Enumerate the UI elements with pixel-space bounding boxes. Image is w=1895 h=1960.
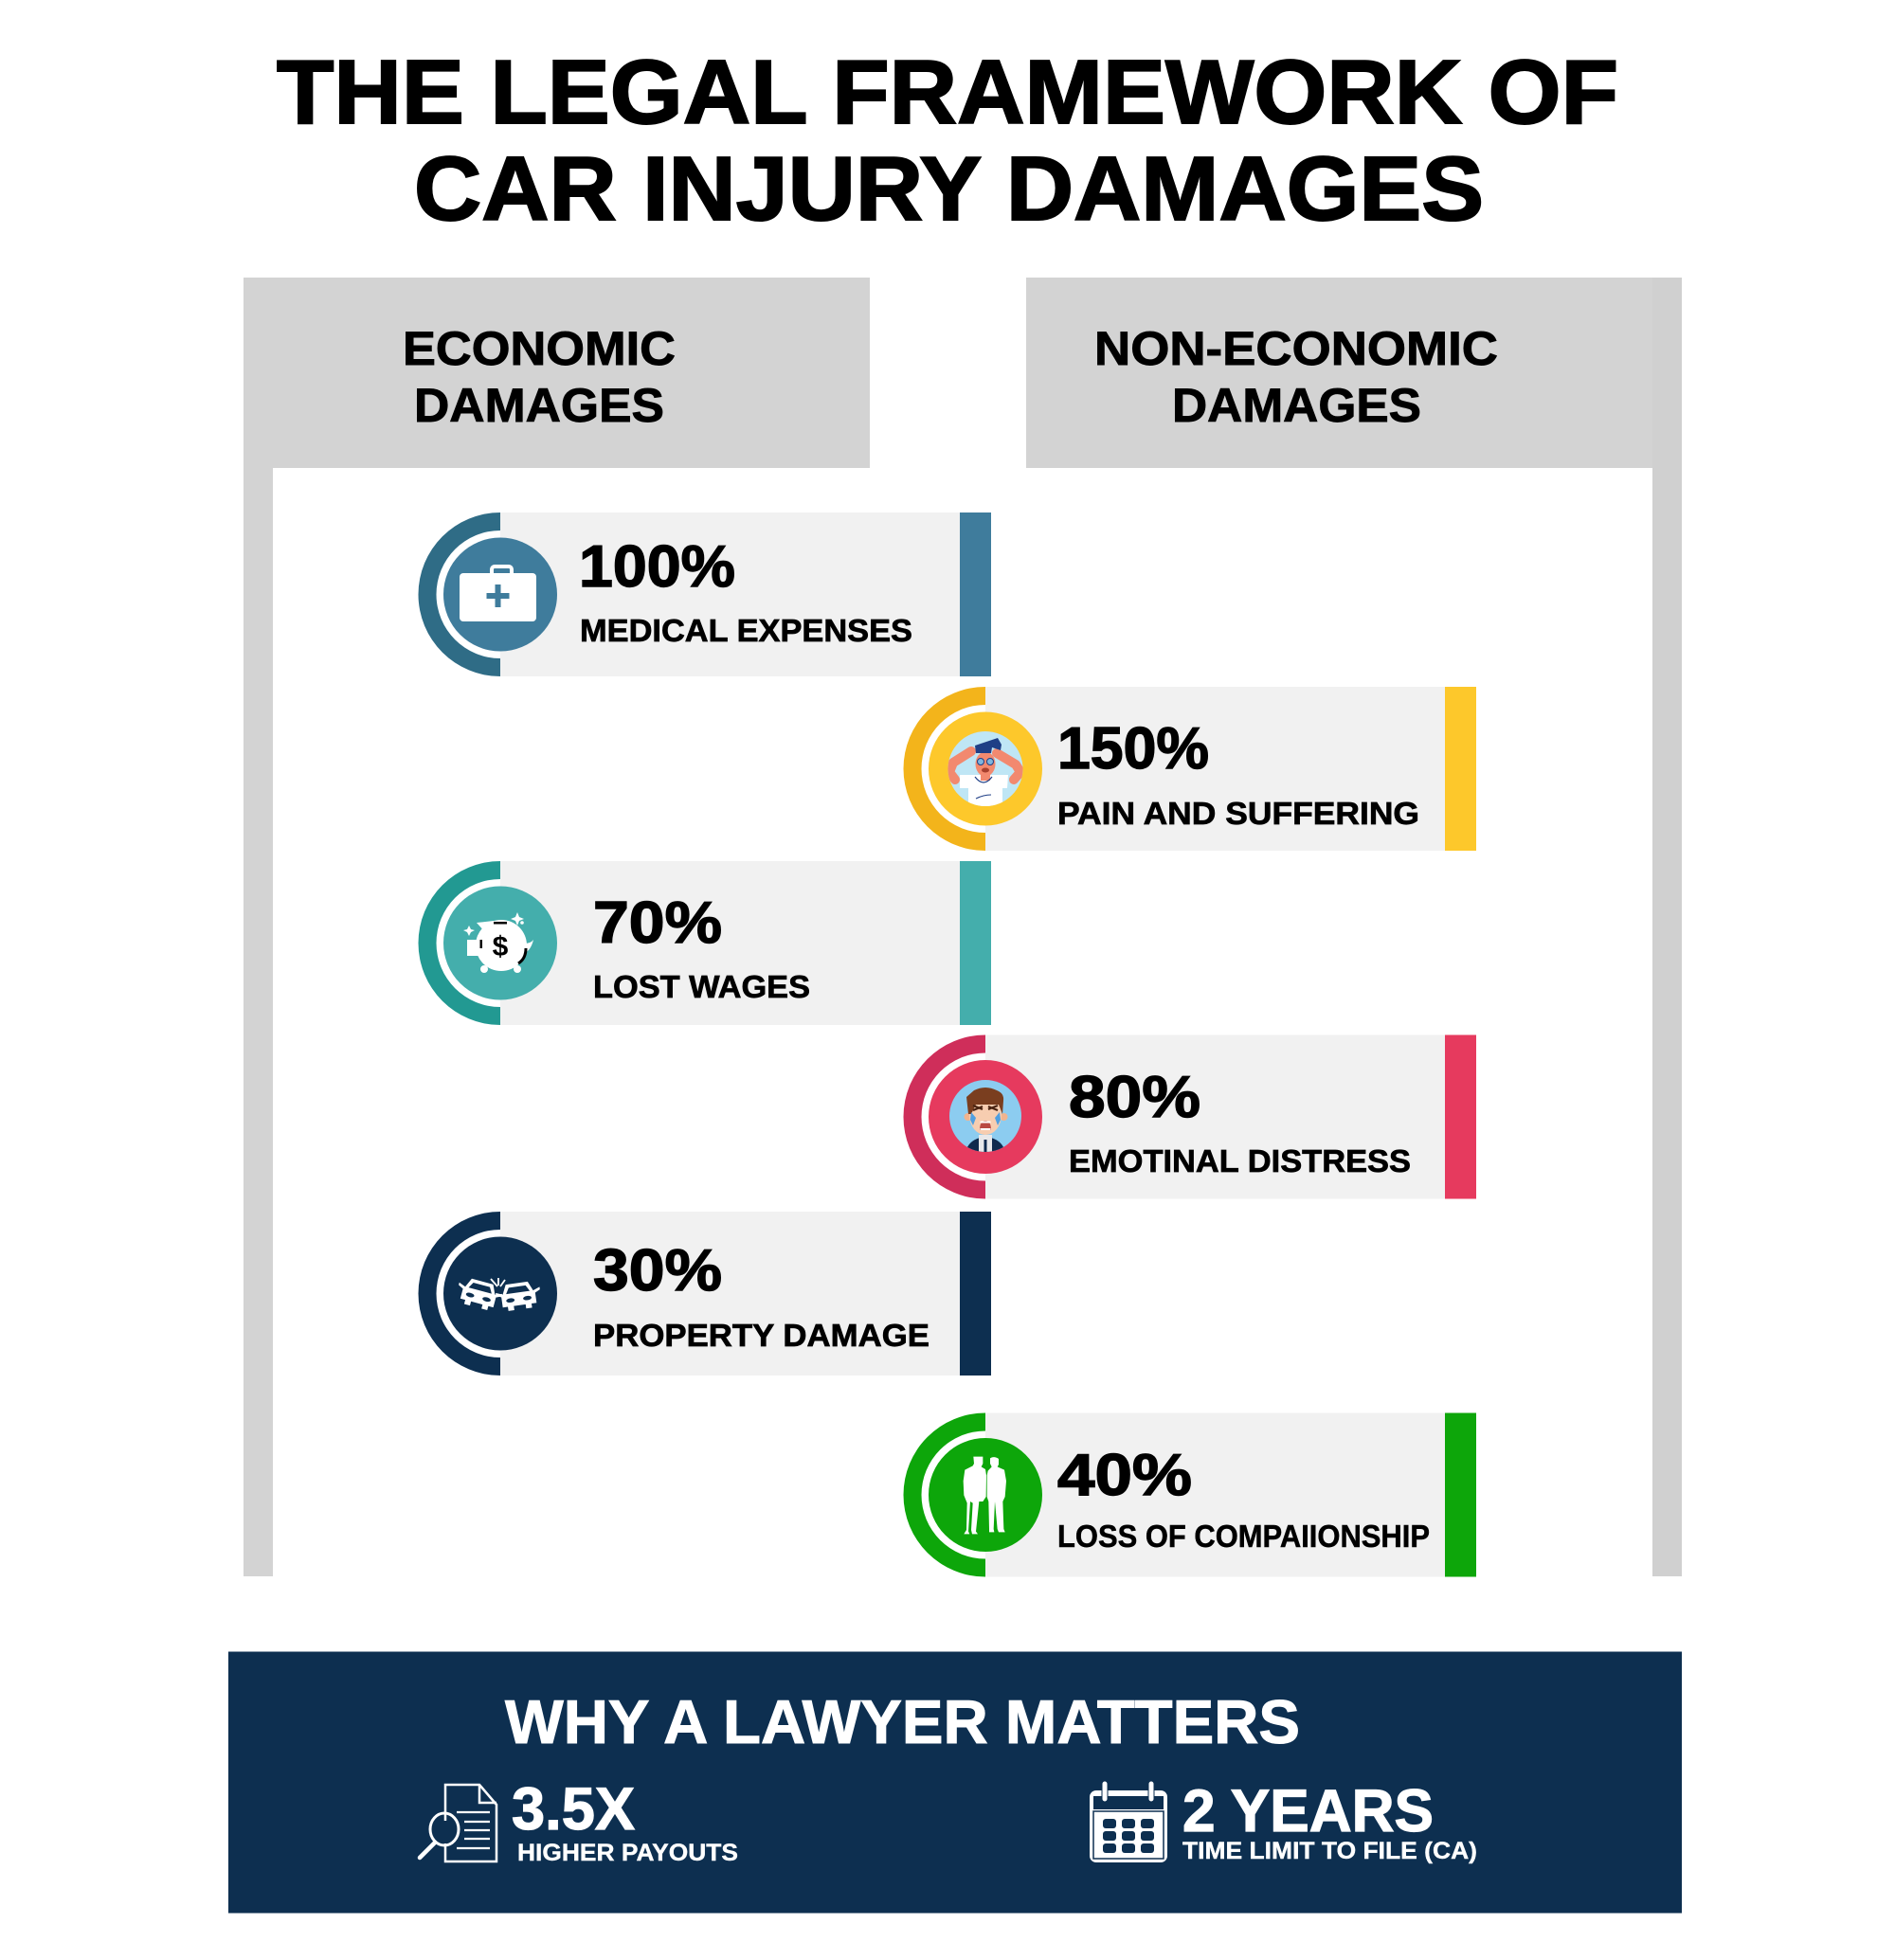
stat: 3.5x higher payouts: HIGHER PAYOUTS	[517, 1840, 738, 1866]
card: pain and suffering	[903, 687, 1476, 851]
heading: non-economic damages: NON-ECONOMIC	[1094, 322, 1498, 375]
panel: economic damages frame	[244, 278, 870, 1576]
value: 100% medical expenses: 100%	[579, 534, 735, 600]
value: 150% pain and suffering: 150%	[1057, 716, 1209, 782]
value: 40% loss of compaiionship	[1057, 1443, 1430, 1554]
heading: non-economic damages: DAMAGES	[1172, 379, 1421, 432]
icon: medical briefcase	[460, 566, 536, 621]
icon part: left car	[454, 1276, 504, 1313]
icon: man holding head	[948, 731, 1023, 807]
stat: 3.5x higher payouts: 3.5X	[512, 1776, 635, 1843]
stat: 2 years time limit to file	[1182, 1778, 1477, 1864]
value: 30% property damage	[593, 1238, 929, 1353]
stat: 3.5x higher payouts	[512, 1776, 738, 1866]
value: 30% property damage: 30%	[593, 1238, 722, 1304]
card: property damage	[418, 1212, 991, 1376]
card: loss of companionship	[903, 1413, 1476, 1576]
icon: piggy bank	[463, 912, 533, 973]
panel: non-economic damages frame	[1026, 278, 1682, 1576]
value: 150% pain and suffering	[1057, 716, 1419, 831]
value: 80% emotional distress: 80%	[1069, 1065, 1200, 1130]
icon: calendar	[1090, 1781, 1167, 1862]
value: 80% emotional distress: EMOTINAL DISTRESS	[1069, 1143, 1411, 1178]
icon part: right car	[495, 1280, 542, 1312]
value: 70% lost wages: LOST WAGES	[593, 969, 810, 1004]
heading: economic damages	[403, 322, 676, 432]
icon: crying man	[949, 1080, 1021, 1153]
heading: why a lawyer matters: WHY A LAWYER MATTERS	[505, 1687, 1300, 1756]
card: medical expenses	[418, 512, 991, 676]
value: 70% lost wages	[593, 890, 810, 1004]
heading: economic damages: ECONOMIC	[403, 322, 676, 375]
title: CAR INJURY DAMAGES	[414, 138, 1484, 240]
value: 40% loss of compaiionship: 40%	[1057, 1443, 1192, 1508]
panel: why a lawyer matters	[228, 1652, 1682, 1914]
card: lost wages	[418, 861, 991, 1025]
value: 80% emotional distress	[1069, 1065, 1411, 1178]
value: 70% lost wages: 70%	[593, 890, 722, 956]
card: emotional distress	[903, 1034, 1476, 1199]
icon: piggy bank: $	[493, 931, 509, 962]
icon: two silhouettes	[964, 1457, 1006, 1534]
value: 100% medical expenses: MEDICAL EXPENSES	[580, 613, 912, 648]
icon: car crash	[454, 1276, 542, 1313]
icon: document with magnifier	[420, 1785, 496, 1861]
value: 30% property damage: PROPERTY DAMAGE	[593, 1318, 929, 1353]
title: THE LEGAL FRAMEWORK OF	[277, 42, 1618, 143]
stat: 2 years time limit to file: TIME LIMIT TO FILE (CA)	[1182, 1838, 1477, 1864]
value: 100% medical expenses	[579, 534, 912, 648]
heading: economic damages: DAMAGES	[414, 379, 664, 432]
value: 40% loss of compaiionship: LOSS OF COMPAIIONSHIP	[1057, 1519, 1430, 1554]
stat: 2 years time limit to file: 2 YEARS	[1182, 1778, 1434, 1844]
value: 150% pain and suffering: PAIN AND SUFFERING	[1057, 796, 1419, 831]
heading: non-economic damages	[1094, 322, 1498, 432]
title	[277, 42, 1618, 240]
